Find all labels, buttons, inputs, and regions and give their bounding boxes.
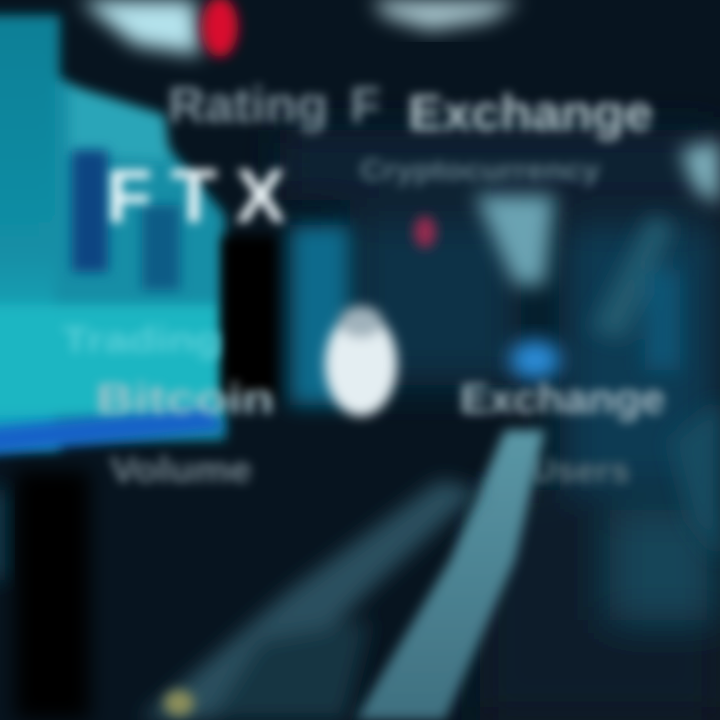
label: left teal caption: Trading bbox=[62, 319, 222, 360]
caption: right: Users bbox=[530, 452, 630, 490]
heading: Rating bbox=[168, 77, 328, 133]
panel: black column bbox=[222, 236, 278, 401]
title: FTX: FTX bbox=[106, 154, 286, 239]
label: right metric: Exchange bbox=[460, 375, 665, 422]
icon: red accent bbox=[202, 0, 238, 57]
icon: blue glow bbox=[509, 340, 561, 380]
icon: yellow accent bbox=[164, 690, 194, 716]
caption: left: Volume bbox=[110, 449, 252, 490]
panel: floor road secondary bbox=[140, 480, 480, 720]
background: ambient tones bbox=[280, 130, 720, 720]
heading: F bbox=[350, 77, 381, 133]
panel: left teal wall bbox=[0, 15, 225, 450]
icon: small red dot bbox=[414, 216, 436, 248]
panel: left bottom tone bbox=[0, 490, 5, 580]
panel: top center light bbox=[372, 0, 520, 30]
icon: white egg bbox=[325, 306, 397, 416]
panel: right diagonal structures bbox=[590, 140, 720, 560]
subheading: Cryptocurrency bbox=[360, 154, 600, 187]
heading: Exchange bbox=[408, 85, 653, 141]
panel: blue band bbox=[0, 408, 225, 455]
panel: top light block bbox=[80, 0, 200, 55]
label: left metric: Bitcoin bbox=[96, 375, 274, 422]
panel: teal column bbox=[290, 225, 350, 405]
panel: light teal trapezoid bbox=[475, 195, 555, 285]
panel: dark blue blocks bbox=[72, 150, 180, 290]
panel: floor road main bbox=[355, 430, 545, 720]
panel: left bottom black bbox=[15, 470, 90, 720]
heading bbox=[168, 77, 653, 141]
